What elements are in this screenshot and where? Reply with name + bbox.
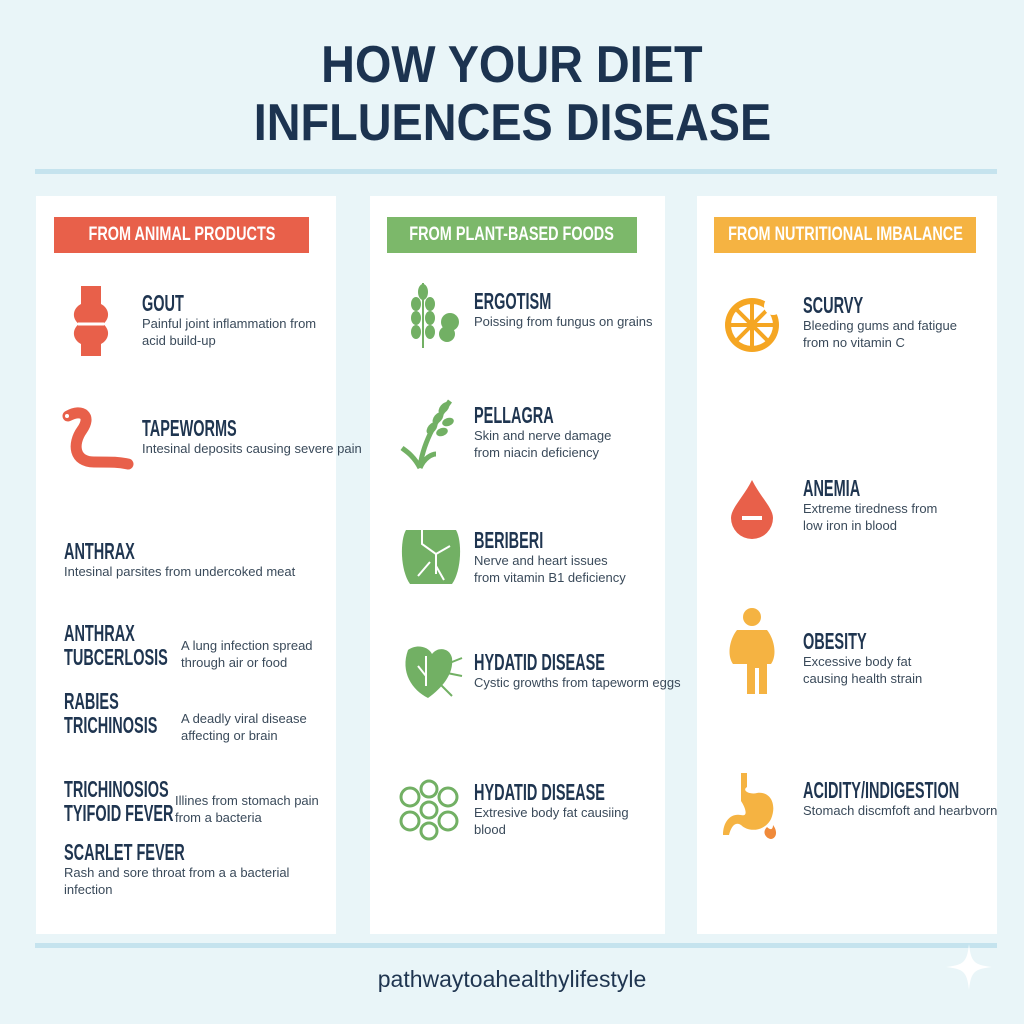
item: gout: acid build-up xyxy=(142,333,216,348)
item: anemia: Extreme tiredness from xyxy=(803,501,937,516)
item: scarlet fever xyxy=(64,839,289,897)
icon: blood drop xyxy=(731,480,773,539)
panel: plant-based xyxy=(370,196,665,934)
item: beriberi: BERIBERI xyxy=(474,527,543,553)
item: trichinosis: TYIFOID FEVER xyxy=(64,800,173,826)
item: obesity: Excessive body fat xyxy=(803,654,911,669)
item: beriberi: from vitamin B1 deficiency xyxy=(474,570,626,585)
icon: heart xyxy=(406,646,462,698)
panel: nutritional imbalance xyxy=(697,196,997,934)
item: scurvy: from no vitamin C xyxy=(803,335,905,350)
panel: animal products: A lung infection spread xyxy=(181,638,313,653)
item: acidity: Stomach discmfoft and hearbvorn xyxy=(803,803,997,818)
item: hydatid disease: Cystic growths from tapeworm eggs xyxy=(474,675,681,690)
icon: stomach xyxy=(723,773,776,839)
item: hydatid disease 2: blood xyxy=(474,822,506,837)
item: scarlet fever: Rash and sore throat from a a bacterial xyxy=(64,865,289,880)
item: pellagra: PELLAGRA xyxy=(474,402,554,428)
icon: grain xyxy=(411,283,459,348)
badge: animal products: FROM ANIMAL PRODUCTS xyxy=(88,224,275,245)
item: gout: Painful joint inflammation from xyxy=(142,316,316,331)
item: gout xyxy=(142,290,316,348)
item: scarlet fever: infection xyxy=(64,882,112,897)
item: anthrax tuberculosis: TUBCERLOSIS xyxy=(64,644,168,670)
item: hydatid disease xyxy=(474,649,681,690)
icon: wheat xyxy=(400,400,454,470)
footer: pathwaytoahealthylifestyle xyxy=(378,966,646,992)
badge: nutritional imbalance xyxy=(714,217,976,253)
item: anthrax xyxy=(64,538,296,579)
item: ergotism xyxy=(474,288,652,329)
panel: animal products: A deadly viral disease xyxy=(181,711,307,726)
item: anemia xyxy=(803,475,937,533)
icon: organ xyxy=(402,530,460,584)
icon: orange xyxy=(725,298,779,352)
panel: animal products: Illines from stomach pain xyxy=(175,793,319,808)
item: trichinosis: TRICHINOSIOS xyxy=(64,776,169,802)
item: acidity: ACIDITY/INDIGESTION xyxy=(803,777,959,803)
badge: nutritional imbalance: FROM NUTRITIONAL IMBALANCE xyxy=(728,224,962,245)
item: ergotism: ERGOTISM xyxy=(474,288,551,314)
item: hydatid disease 2: Extresive body fat causiing xyxy=(474,805,629,820)
title xyxy=(253,36,771,152)
item: trichinosis xyxy=(64,776,174,826)
item: rabies xyxy=(64,688,157,738)
title: INFLUENCES DISEASE xyxy=(253,94,771,152)
item: anthrax: Intesinal parsites from undercoked meat xyxy=(64,564,295,579)
item: anthrax tuberculosis: ANTHRAX xyxy=(64,620,135,646)
item: acidity xyxy=(803,777,997,818)
item: pellagra xyxy=(474,402,611,460)
badge: animal products xyxy=(54,217,309,253)
icon: sparkle xyxy=(948,944,990,988)
item: tapeworms: Intesinal deposits causing severe pain xyxy=(142,441,362,456)
panel: animal products xyxy=(36,196,336,934)
item: beriberi: Nerve and heart issues xyxy=(474,553,608,568)
item: rabies: TRICHINOSIS xyxy=(64,712,157,738)
panel: animal products: through air or food xyxy=(181,655,287,670)
item: pellagra: from niacin deficiency xyxy=(474,445,599,460)
item: hydatid disease: HYDATID DISEASE xyxy=(474,649,605,675)
panel: animal products: affecting or brain xyxy=(181,728,278,743)
item: anemia: ANEMIA xyxy=(803,475,860,501)
item: beriberi xyxy=(474,527,626,585)
item: ergotism: Poissing from fungus on grains xyxy=(474,314,652,329)
item: scurvy: Bleeding gums and fatigue xyxy=(803,318,957,333)
item: scurvy xyxy=(803,292,957,350)
item: tapeworms xyxy=(142,415,362,456)
title: HOW YOUR DIET xyxy=(321,36,703,94)
item: tapeworms: TAPEWORMS xyxy=(142,415,237,441)
item: pellagra: Skin and nerve damage xyxy=(474,428,611,443)
item: scurvy: SCURVY xyxy=(803,292,863,318)
badge: plant-based xyxy=(387,217,637,253)
icon: person xyxy=(730,608,774,694)
item: hydatid disease 2: HYDATID DISEASE xyxy=(474,779,605,805)
item: obesity xyxy=(803,628,922,686)
item: hydatid disease 2 xyxy=(474,779,629,837)
icon: joint xyxy=(74,286,108,356)
item: anthrax tuberculosis xyxy=(64,620,168,670)
icon: worm xyxy=(62,407,134,470)
item: gout: GOUT xyxy=(142,290,184,316)
icon: cells xyxy=(400,780,458,840)
item: rabies: RABIES xyxy=(64,688,119,714)
item: obesity: OBESITY xyxy=(803,628,867,654)
item: anthrax: ANTHRAX xyxy=(64,538,135,564)
item: scarlet fever: SCARLET FEVER xyxy=(64,839,185,865)
panel: animal products: from a bacteria xyxy=(175,810,262,825)
item: anemia: low iron in blood xyxy=(803,518,897,533)
item: obesity: causing health strain xyxy=(803,671,922,686)
badge: plant-based: FROM PLANT-BASED FOODS xyxy=(410,224,614,245)
